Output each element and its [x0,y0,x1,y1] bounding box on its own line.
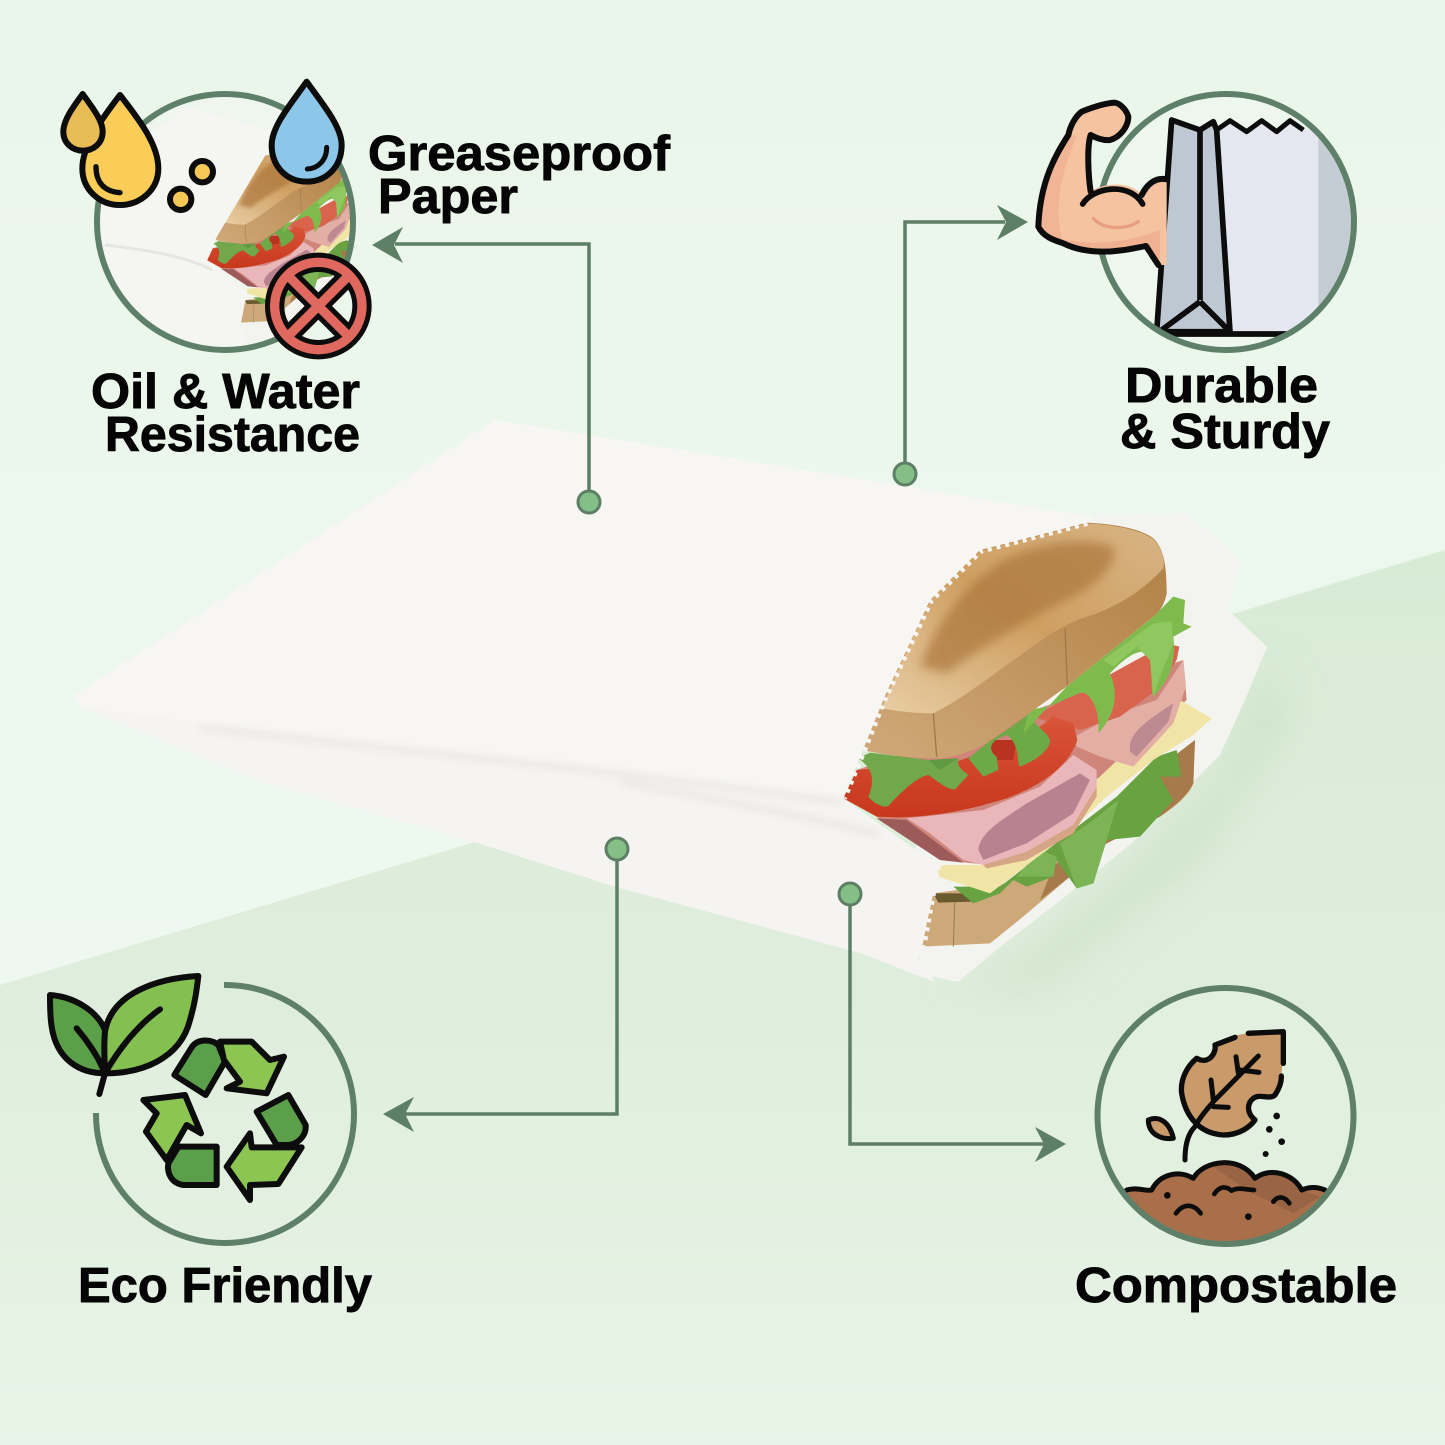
filling underlay [857,660,1187,865]
bag back panel [900,513,1267,982]
bag with sandwich photo [72,420,1290,990]
cheese [938,700,1212,893]
icon: compost particles [1263,1113,1285,1157]
lower lettuce [953,750,1182,903]
oil drop highlight [96,167,120,193]
heading: greaseproof paper: Greaseproof [368,127,671,181]
front tomato [843,717,1077,817]
icon: big leaf [104,976,198,1073]
icon: recycle arrow right [227,1095,306,1200]
heading: greaseproof paper: Paper [378,170,518,224]
bag second fold shadow [621,782,880,835]
icon: recycle arrow left [143,1095,217,1185]
panel: eco friendly icon [50,976,354,1243]
rear ham [1075,660,1186,767]
icon: oil bubbles [170,161,213,210]
icon: decaying leaf [1181,1032,1283,1135]
bag fold shadow [200,728,842,802]
lettuce right [1023,597,1192,733]
leaf veins and stem [1185,1056,1259,1160]
heading: durable and sturdy [1120,359,1330,459]
connector: durable [894,205,1028,485]
heading: eco friendly: Eco Friendly [78,1259,372,1313]
water drop highlight [307,147,327,169]
heading: oil and water resistance [91,365,360,462]
dark tomato patch [987,740,1017,760]
heading: greaseproof paper [368,127,671,224]
heading: oil and water resistance: Resistance [105,408,360,462]
bag front lower panel [80,707,937,982]
bottom toast [922,740,1195,947]
panel: compostable icon [1098,988,1354,1270]
front ham [877,755,1097,868]
heading: durable and sturdy: Durable [1125,359,1318,413]
icon: oil drop small [63,94,103,151]
icon: flexed arm [1038,103,1167,265]
icon: oil drop large [82,95,158,205]
sandwich [843,523,1212,947]
bag front upper panel [72,420,1095,798]
serrated bag mouth [843,522,1087,798]
icon: paper bag [1157,113,1358,340]
rear tomato [1033,643,1179,730]
icon: small leaf [50,995,105,1073]
connector: eco friendly [383,838,628,1132]
lettuce left [858,753,968,807]
bag shadow [950,660,1290,990]
heading: durable and sturdy: & Sturdy [1120,405,1330,459]
connector: compostable [839,883,1066,1162]
panel: durable icon [1038,94,1358,350]
heading: compostable: Compostable [1075,1259,1397,1313]
icon: prohibition cross [275,262,362,350]
lettuce centre [968,713,1050,777]
serrated lower mouth [918,865,937,958]
circle arc [96,985,354,1243]
top toast [863,523,1167,758]
icon: water drop [272,82,342,182]
icon: soil [1124,1160,1328,1241]
icon: recycle arrow top [174,1041,284,1095]
heading: oil and water resistance: Oil & Water [91,365,360,419]
circle with mini bag [90,94,362,350]
panel: oil and water resistance icon [63,82,362,350]
leaf veins [77,1009,160,1094]
icon: small leaf [1148,1119,1173,1139]
connector: greaseproof [372,227,600,513]
